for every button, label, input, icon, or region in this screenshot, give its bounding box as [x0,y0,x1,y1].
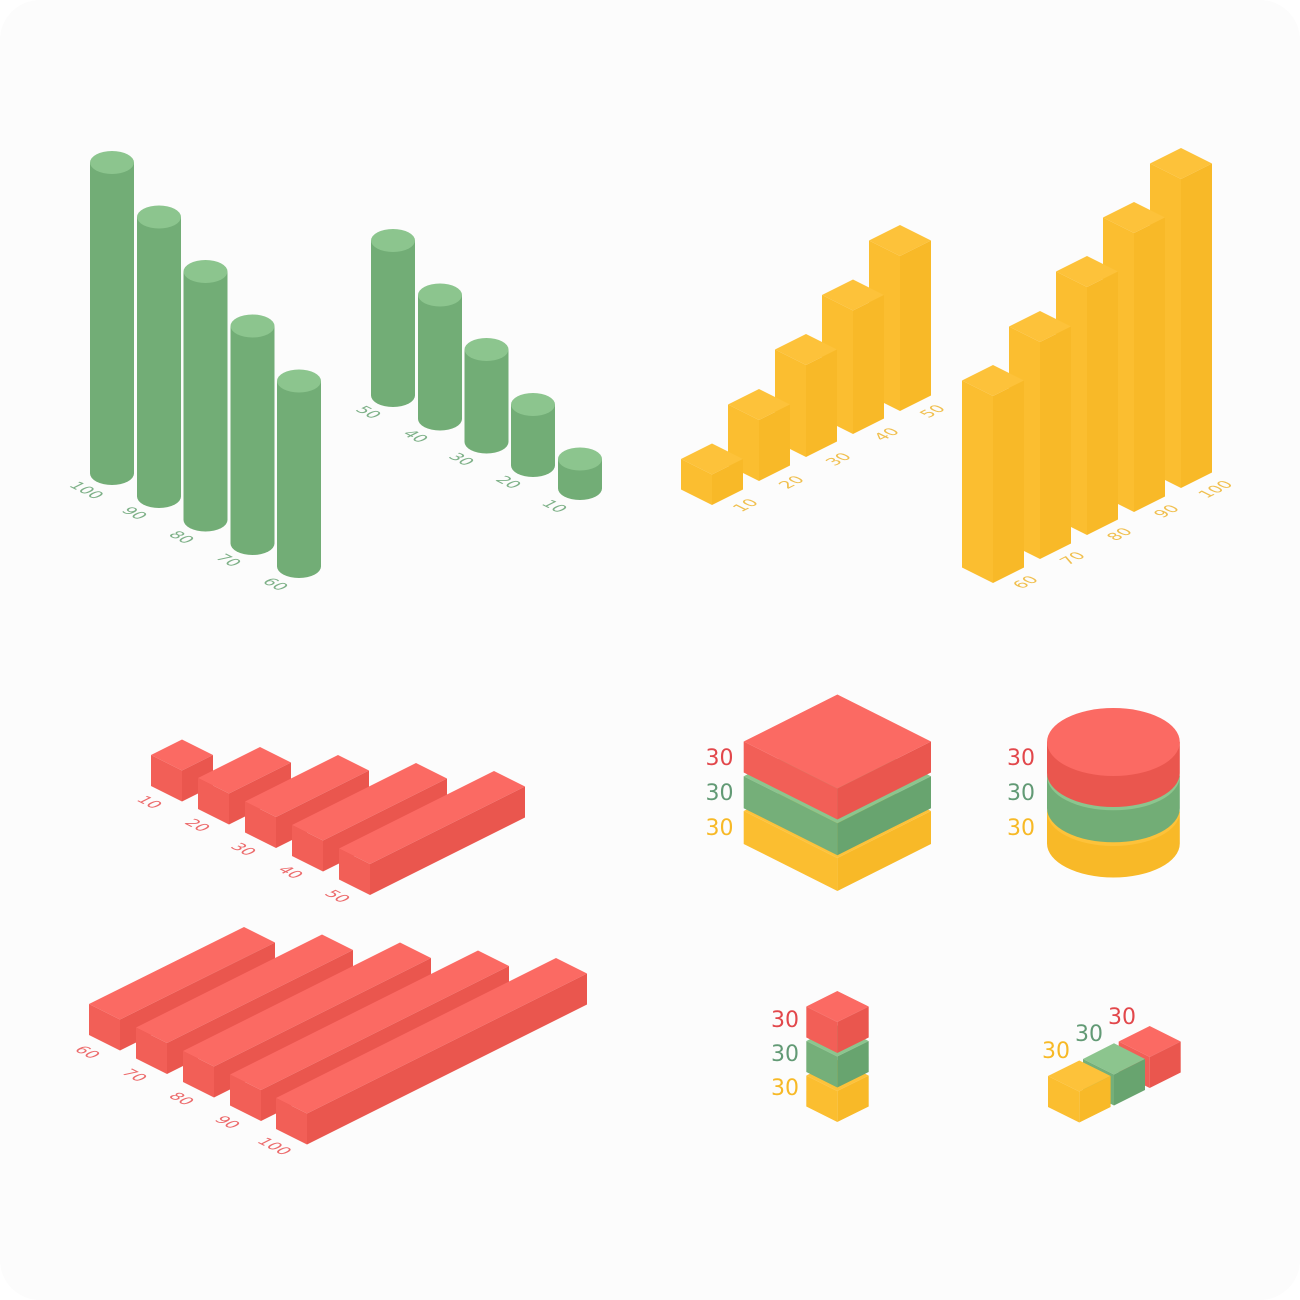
labels: tall green cylinders: 90 [117,504,152,522]
labels: short green cylinders: 30 [444,450,479,468]
yellow disc [1047,778,1180,878]
chart: small yellow columns [681,225,950,514]
column 10 [681,444,743,505]
red cube [1119,1026,1181,1088]
cylinder 40 [418,284,462,430]
green layer [744,729,931,855]
bar 30 [245,755,369,848]
labels: vertical stack: 30 [771,1008,799,1033]
column 20 [728,389,790,481]
labels: long red bars: 100 [252,1135,297,1157]
labels: square slab: 30 [706,781,734,806]
column 70 [1009,311,1071,559]
column 30 [775,334,837,457]
labels: short red bars: 50 [320,887,355,905]
labels: vertical stack: 30 [771,1042,799,1067]
labels: square slab [706,746,734,841]
column 100 [1150,148,1212,488]
chart: vertical cube stack [771,991,869,1122]
chart: short green cylinders [351,229,602,515]
labels: horizontal row: 30 [1108,1005,1136,1030]
column 90 [1103,202,1165,512]
labels: tall green cylinders: 80 [164,528,199,546]
labels: tall green cylinders: 100 [64,479,109,501]
red cube [806,991,869,1053]
labels: large yellow columns: 60 [1008,573,1043,591]
labels: large yellow columns: 70 [1055,549,1090,567]
labels: cylinder: 30 [1007,816,1035,841]
chart: short red bars [132,740,525,905]
labels: small yellow columns: 10 [728,496,763,514]
bar 40 [292,763,447,872]
bar 80 [183,942,431,1098]
chart: long red bars [70,927,587,1157]
labels: vertical stack [771,1008,799,1101]
labels: long red bars [70,1043,297,1157]
cylinder 80 [184,260,228,532]
green cube [1083,1043,1145,1106]
column 40 [822,280,884,434]
cylinder 90 [137,206,181,508]
chart: large yellow columns [962,148,1238,591]
bar 60 [89,927,275,1050]
cylinder 10 [558,448,602,500]
labels: short red bars: 10 [132,793,167,811]
bar 20 [198,747,291,824]
bar 100 [276,958,587,1144]
column 80 [1056,256,1118,535]
labels: vertical stack: 30 [771,1076,799,1101]
labels: large yellow columns: 100 [1193,478,1238,500]
red disc [1047,708,1180,807]
labels: large yellow columns: 80 [1102,525,1137,543]
cylinder 20 [511,393,555,477]
column 60 [962,365,1024,583]
yellow cube [1048,1060,1111,1122]
bar 10 [151,740,213,802]
labels: short green cylinders: 50 [351,403,386,421]
yellow layer [744,764,931,891]
labels: square slab: 30 [706,816,734,841]
labels: short green cylinders: 10 [537,497,572,515]
labels: short red bars: 20 [180,816,215,834]
cylinder 60 [277,370,321,578]
labels: short red bars: 40 [273,863,308,881]
labels: short green cylinders [351,403,572,515]
labels: long red bars: 70 [117,1066,152,1084]
labels: long red bars: 80 [164,1090,199,1108]
labels: square slab: 30 [706,746,734,771]
labels: horizontal row: 30 [1042,1039,1070,1064]
cylinder 100 [90,151,134,485]
labels: long red bars: 60 [70,1043,105,1061]
yellow cube [806,1060,869,1122]
cylinder 70 [230,314,274,555]
labels: small yellow columns: 20 [774,473,809,491]
labels: large yellow columns [1008,478,1238,591]
chart: stacked square slab [706,694,931,891]
green cube [806,1026,869,1088]
cylinder 50 [371,229,415,407]
labels: small yellow columns: 30 [821,450,856,468]
bar 70 [136,934,353,1074]
chart: stacked cylinder [1007,708,1180,878]
bar 90 [230,950,509,1121]
labels: horizontal row [1042,1005,1136,1064]
green disc [1047,742,1180,842]
labels: short red bars: 30 [226,840,261,858]
labels: small yellow columns: 50 [915,402,950,420]
labels: short green cylinders: 20 [491,473,526,491]
chart: horizontal cube row [1042,1005,1181,1122]
labels: small yellow columns [728,402,950,514]
labels: tall green cylinders: 60 [258,575,293,593]
labels: tall green cylinders [64,479,293,593]
column 50 [869,225,931,411]
labels: cylinder [1007,746,1035,841]
labels: long red bars: 90 [210,1113,245,1131]
labels: horizontal row: 30 [1075,1022,1103,1047]
labels: short red bars [132,793,355,905]
labels: tall green cylinders: 70 [211,551,246,569]
labels: cylinder: 30 [1007,781,1035,806]
labels: small yellow columns: 40 [869,425,904,443]
bar 50 [339,771,525,895]
labels: short green cylinders: 40 [398,427,433,445]
labels: large yellow columns: 90 [1149,502,1184,520]
chart: tall green cylinders [64,151,321,593]
labels: cylinder: 30 [1007,746,1035,771]
cylinder 30 [464,338,508,454]
red layer [744,694,931,820]
